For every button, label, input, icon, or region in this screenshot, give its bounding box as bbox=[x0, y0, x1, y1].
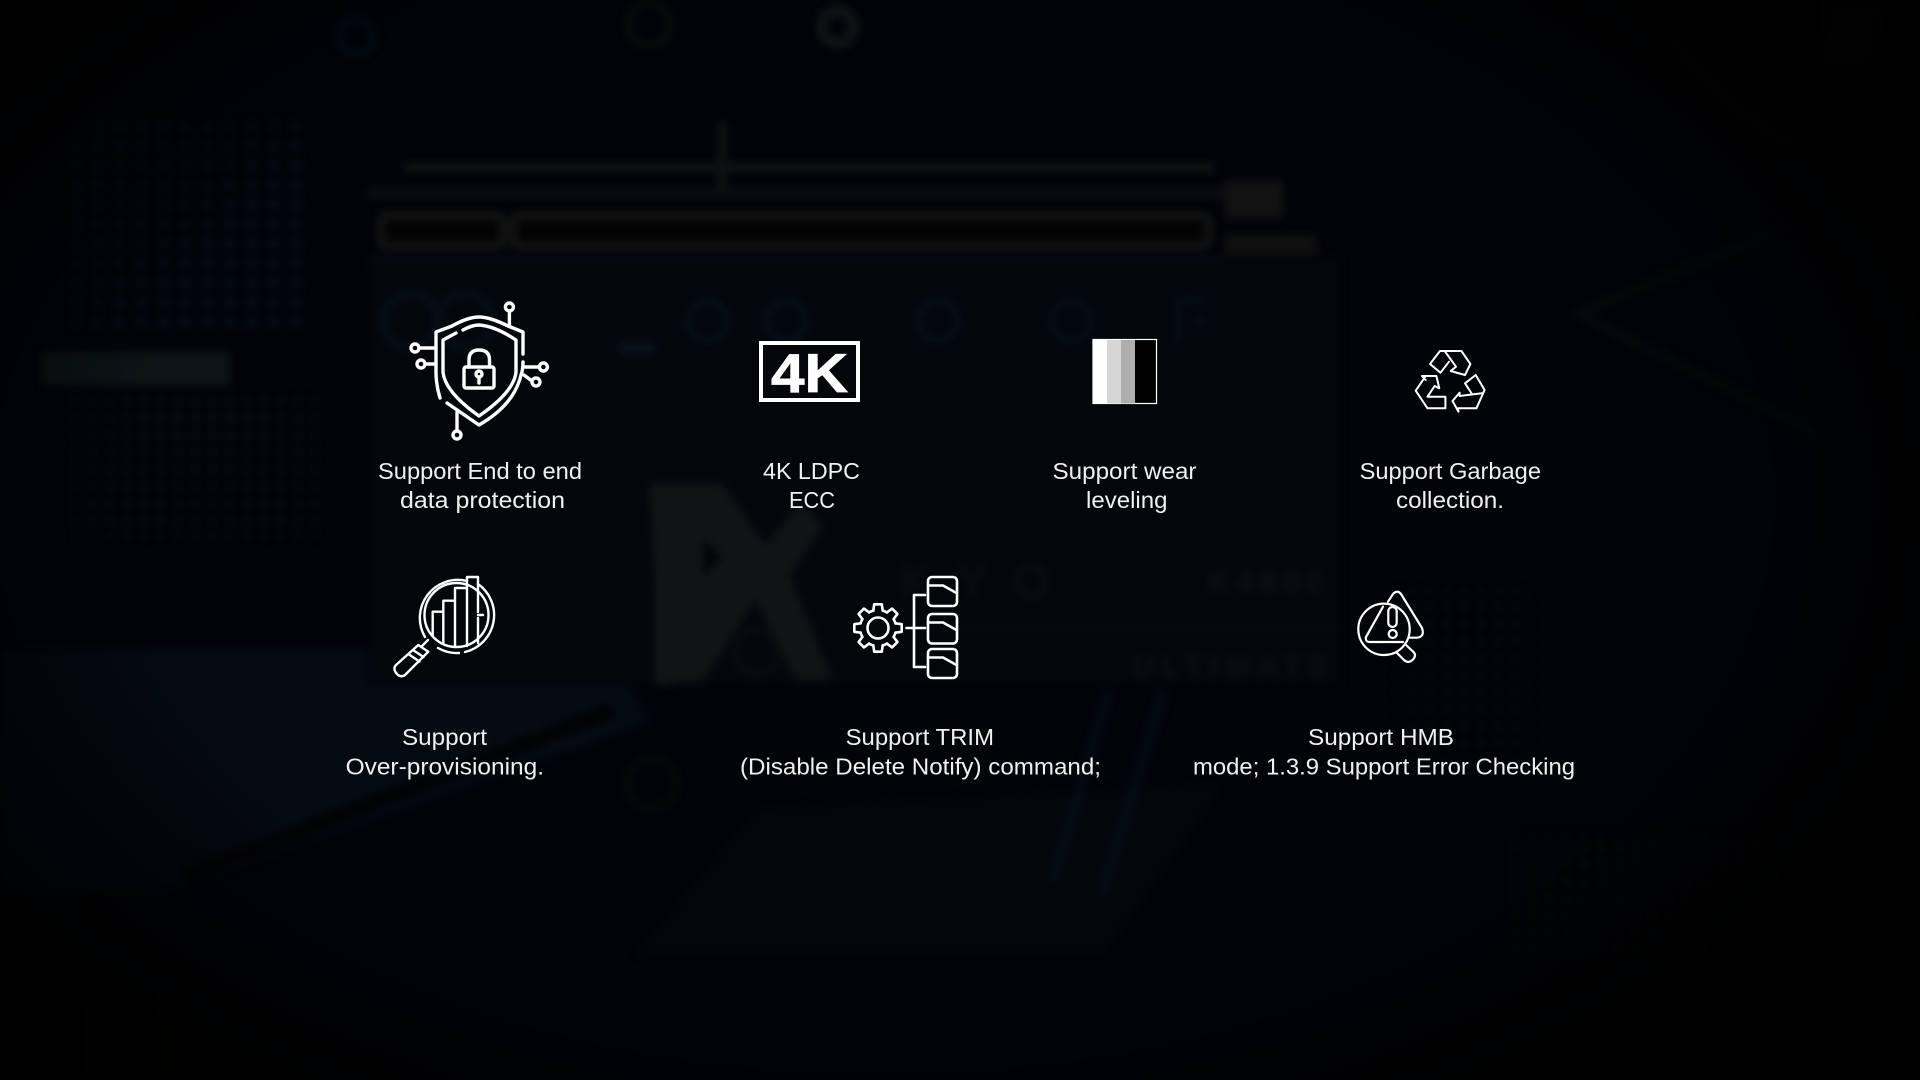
caption: 4K LDPC bbox=[763, 458, 860, 513]
caption: TRIM command bbox=[740, 724, 1101, 780]
caption: garbage collection: collection. bbox=[1396, 487, 1504, 513]
caption: wear leveling bbox=[1052, 458, 1197, 513]
caption: end to end bbox=[378, 458, 582, 513]
icon: 4K badge: 4K bbox=[771, 342, 848, 404]
caption: wear leveling: Support wear bbox=[1052, 458, 1197, 484]
background: blurred circuit board photo: K4800 bbox=[1209, 567, 1322, 600]
icon: wear level gradient bars bbox=[1092, 339, 1156, 404]
feature: 4K LDPC ECC bbox=[761, 342, 860, 513]
caption: 4K LDPC: ECC bbox=[789, 487, 835, 513]
icon: shield with lock and circuit traces bbox=[411, 303, 547, 439]
feature: wear leveling bbox=[1052, 339, 1197, 513]
feature: end to end data protection bbox=[378, 303, 582, 513]
caption: over-provisioning bbox=[346, 724, 544, 780]
caption: wear leveling: leveling bbox=[1086, 487, 1168, 513]
caption: HMB and error checking bbox=[1193, 724, 1575, 780]
caption: garbage collection: Support Garbage bbox=[1360, 458, 1541, 484]
icon: gear with folder tree bbox=[854, 577, 957, 678]
feature: HMB and error checking bbox=[1193, 592, 1575, 780]
feature: TRIM command bbox=[740, 577, 1101, 780]
caption: HMB and error checking: mode; 1.3.9 Support Error Checking bbox=[1193, 754, 1575, 780]
icon: recycle arrows bbox=[1416, 351, 1485, 412]
feature: garbage collection bbox=[1360, 351, 1541, 513]
caption: 4K LDPC: 4K LDPC bbox=[763, 458, 860, 484]
icon: warning triangle under magnifier bbox=[1358, 592, 1423, 662]
caption: end to end: Support End to end bbox=[378, 458, 582, 484]
caption: TRIM command: Support TRIM bbox=[846, 724, 994, 750]
caption: TRIM command: (Disable Delete Notify) command; bbox=[740, 754, 1101, 780]
icon: magnifier over bar chart bbox=[394, 577, 494, 676]
caption: over-provisioning: Over-provisioning. bbox=[346, 754, 544, 780]
background: blurred circuit board photo: ULTIMATE bbox=[1133, 650, 1329, 683]
background: blurred circuit board photo: KYO bbox=[900, 556, 1049, 608]
caption: HMB and error checking: Support HMB bbox=[1308, 724, 1454, 750]
feature: over-provisioning bbox=[346, 577, 544, 780]
caption: over-provisioning: Support bbox=[402, 724, 487, 750]
caption: end to end: data protection bbox=[400, 487, 565, 513]
caption: garbage collection bbox=[1360, 458, 1541, 513]
